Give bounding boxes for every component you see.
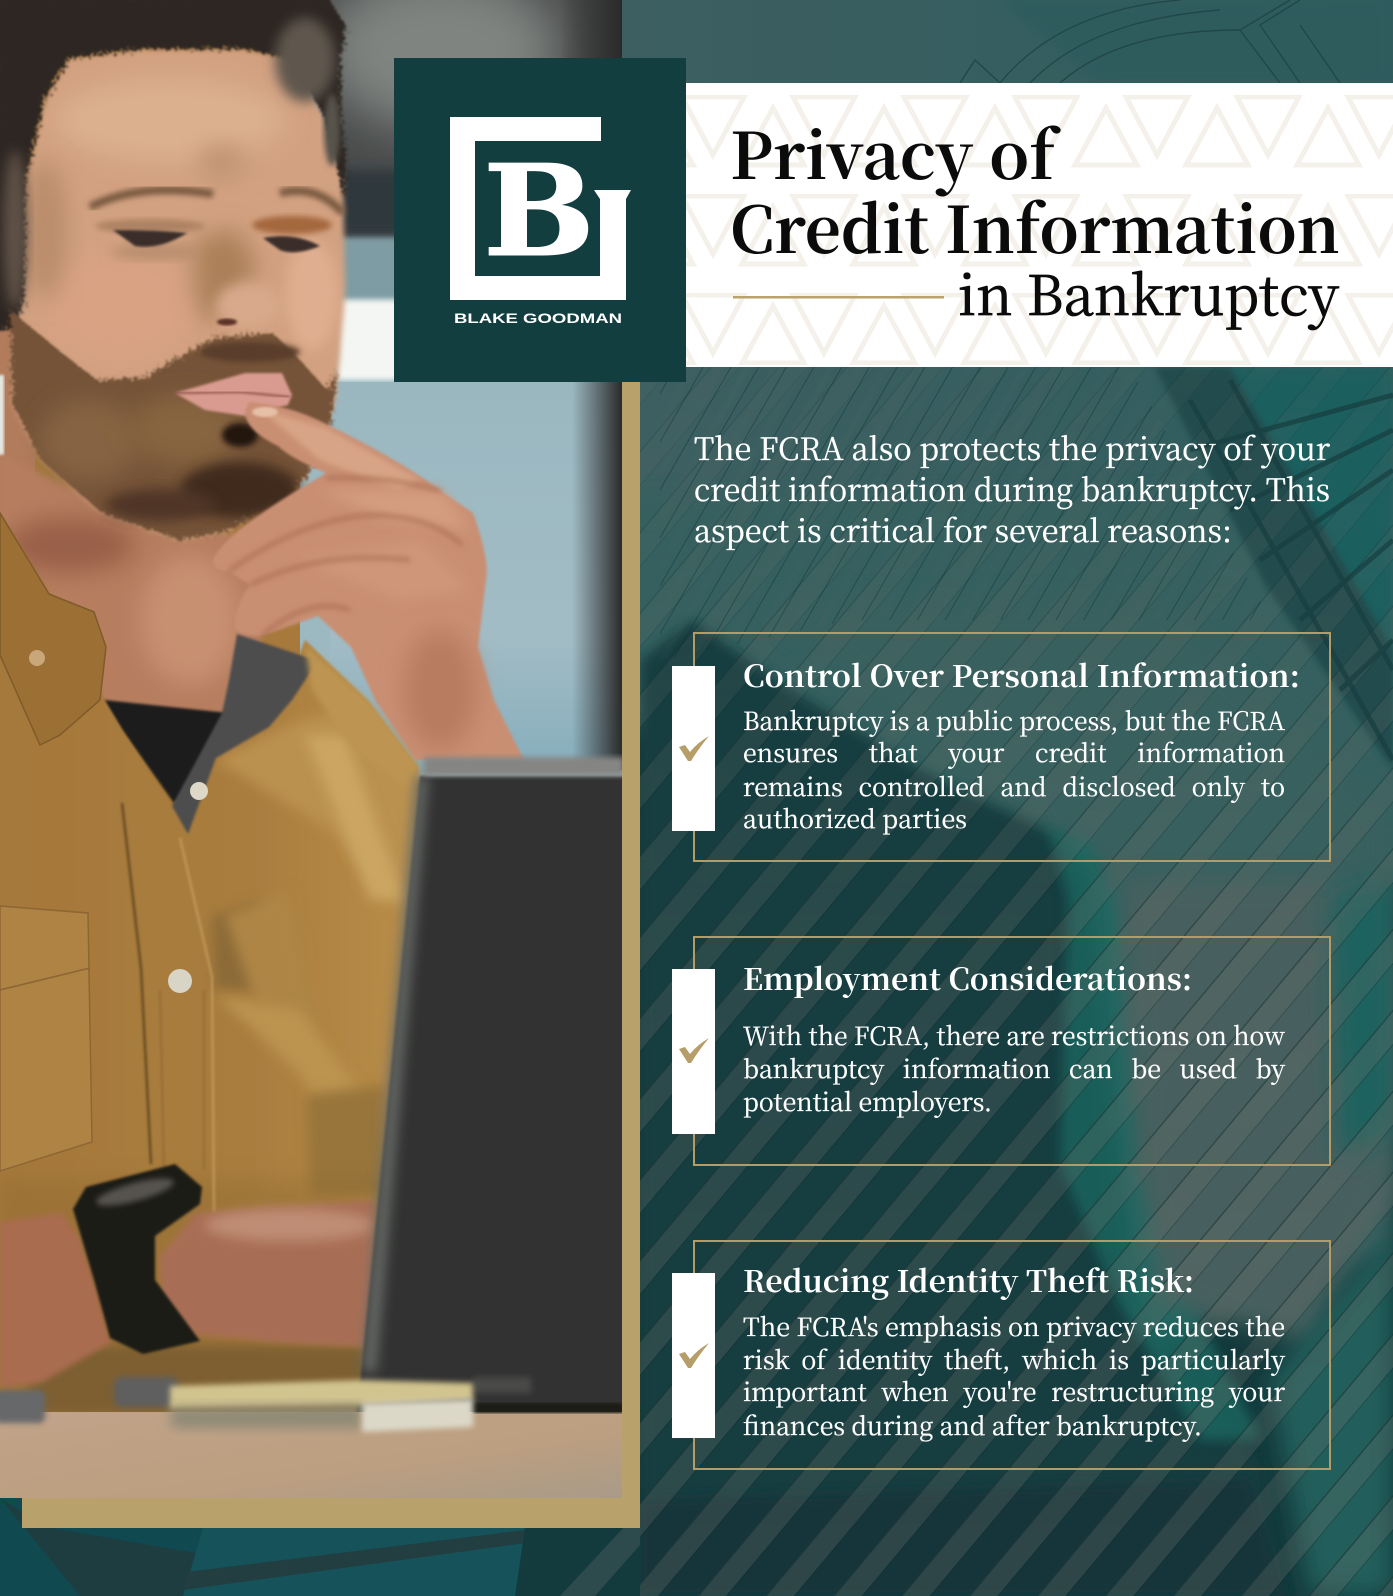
dark left tower bbox=[640, 617, 1056, 847]
body text: authorized parties bbox=[743, 800, 967, 836]
beard bbox=[10, 310, 338, 540]
body text: Bankruptcy is a public process, but the FCRA bbox=[743, 702, 1285, 738]
face bbox=[12, 49, 345, 540]
panel: employment considerations bbox=[672, 936, 1331, 1166]
ear and neck side bbox=[0, 327, 35, 514]
panel border bbox=[693, 1240, 1331, 1470]
laptop bbox=[355, 757, 640, 1420]
icon: check mark bbox=[679, 1343, 709, 1368]
intro paragraph: credit information during bankruptcy. This bbox=[694, 465, 1330, 510]
shoulder highlight bbox=[303, 649, 420, 771]
icon: check mark bbox=[679, 1038, 709, 1063]
intro paragraph: The FCRA also protects the privacy of your bbox=[694, 424, 1331, 469]
shirt bbox=[0, 513, 420, 1420]
office background bbox=[300, 0, 640, 780]
body text: ensures that your credit information bbox=[743, 734, 1285, 770]
desk bbox=[0, 1412, 627, 1502]
body text: important when you're restructuring your bbox=[743, 1373, 1285, 1409]
title line 2: Credit Information bbox=[730, 180, 1340, 272]
body text bbox=[743, 702, 1285, 836]
logo frame bbox=[450, 117, 631, 300]
icon: check mark bbox=[679, 736, 709, 761]
shirt buttons bbox=[29, 650, 208, 993]
black tee bbox=[104, 700, 229, 806]
title line 1: Privacy of bbox=[730, 106, 1061, 198]
title rule bbox=[733, 296, 944, 298]
eye sockets bbox=[252, 216, 332, 234]
grey right facade bbox=[1125, 880, 1393, 1344]
panel: reducing identity theft risk bbox=[672, 1240, 1331, 1470]
body text: risk of identity theft, which is particularly bbox=[743, 1341, 1285, 1377]
body text: bankruptcy information can be used by bbox=[743, 1050, 1285, 1086]
right teal facade bbox=[1232, 367, 1393, 646]
body text: The FCRA's emphasis on privacy reduces the bbox=[743, 1308, 1285, 1344]
white tab bbox=[672, 969, 715, 1134]
logo panel bbox=[394, 58, 686, 382]
teal central strip bbox=[1048, 827, 1262, 1440]
white tab bbox=[672, 1273, 715, 1438]
forearm and wrist bbox=[0, 1200, 375, 1387]
heading: Employment Considerations: bbox=[743, 955, 1192, 999]
photo: man looking at laptop bbox=[0, 0, 640, 1502]
logo letter: B bbox=[483, 137, 595, 285]
panel border bbox=[693, 936, 1331, 1166]
body text bbox=[743, 1017, 1286, 1119]
body text: finances during and after bankruptcy. bbox=[743, 1407, 1202, 1443]
panel border bbox=[693, 632, 1331, 862]
intro paragraph: aspect is critical for several reasons: bbox=[694, 506, 1232, 551]
title banner bbox=[686, 83, 1393, 367]
mid grey-teal tower bbox=[992, 792, 1393, 1324]
lips bbox=[175, 373, 292, 416]
desk objects bbox=[0, 1377, 623, 1432]
heading: Reducing Identity Theft Risk: bbox=[743, 1257, 1194, 1301]
heading: Control Over Personal Information: bbox=[743, 652, 1300, 696]
intro paragraph bbox=[694, 424, 1331, 551]
body text: remains controlled and disclosed only to bbox=[743, 768, 1285, 804]
eyes bbox=[113, 230, 320, 252]
watch bbox=[73, 1164, 202, 1354]
bottom-left building strip bbox=[0, 1498, 640, 1596]
raised hand bbox=[213, 402, 524, 760]
panel: control over personal information bbox=[672, 632, 1331, 862]
grey inner collar bbox=[172, 634, 318, 834]
white tab bbox=[672, 666, 715, 831]
title line 3: in Bankruptcy bbox=[958, 252, 1340, 331]
body text bbox=[743, 1308, 1286, 1443]
logo name: BLAKE GOODMAN bbox=[454, 310, 622, 326]
neck bbox=[0, 455, 262, 730]
nose shadow bbox=[195, 228, 258, 325]
gold frame bbox=[22, 370, 640, 1528]
hair bbox=[0, 0, 346, 330]
body text: With the FCRA, there are restrictions on how bbox=[743, 1017, 1285, 1053]
body text: potential employers. bbox=[743, 1083, 992, 1119]
